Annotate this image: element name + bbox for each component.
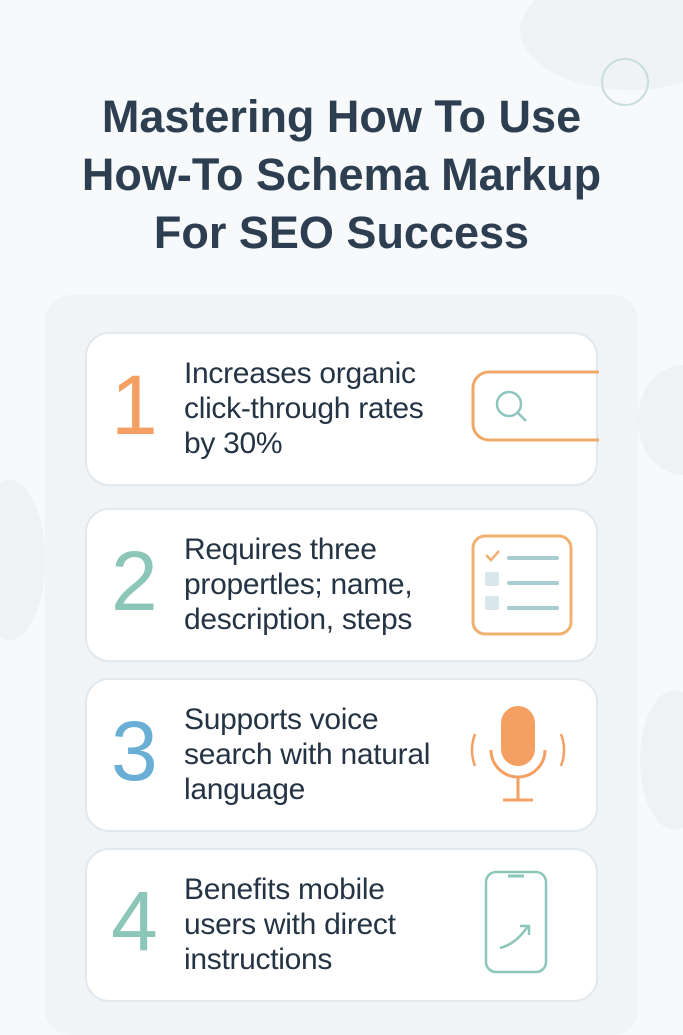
text 2: Requires three xyxy=(184,533,377,566)
text 3: language xyxy=(184,773,305,806)
text 4: Benefits mobile xyxy=(184,873,385,906)
icon: search bar xyxy=(472,370,599,442)
icon: microphone xyxy=(470,706,566,802)
panel: list container xyxy=(45,295,638,1035)
text 1: by 30% xyxy=(184,427,282,460)
title: How-To Schema Markup xyxy=(82,149,601,200)
text 1 xyxy=(184,357,423,460)
card 3 xyxy=(85,678,598,832)
number 2: 2 xyxy=(111,534,158,628)
text 2: description, steps xyxy=(184,603,412,636)
text 1: click-through rates xyxy=(184,392,423,425)
number 3: 3 xyxy=(111,704,158,798)
card 4 xyxy=(85,848,598,1002)
text 3: Supports voice xyxy=(184,703,378,736)
card 1 xyxy=(85,332,598,486)
card 2 xyxy=(85,508,598,662)
number 1: 1 xyxy=(111,358,158,452)
title: Mastering How To Use xyxy=(102,91,581,142)
text 1: Increases organic xyxy=(184,357,416,390)
text 4: users with direct xyxy=(184,908,396,941)
icon: checklist xyxy=(472,534,572,636)
text 4 xyxy=(184,873,396,976)
number 4: 4 xyxy=(111,874,158,968)
title: For SEO Success xyxy=(154,207,529,258)
icon: phone xyxy=(484,870,548,974)
text 3: search with natural xyxy=(184,738,430,771)
text 2: propertles; name, xyxy=(184,568,412,601)
text 4: instructions xyxy=(184,943,332,976)
text 2 xyxy=(184,533,412,636)
title xyxy=(82,91,601,258)
text 3 xyxy=(184,703,430,806)
